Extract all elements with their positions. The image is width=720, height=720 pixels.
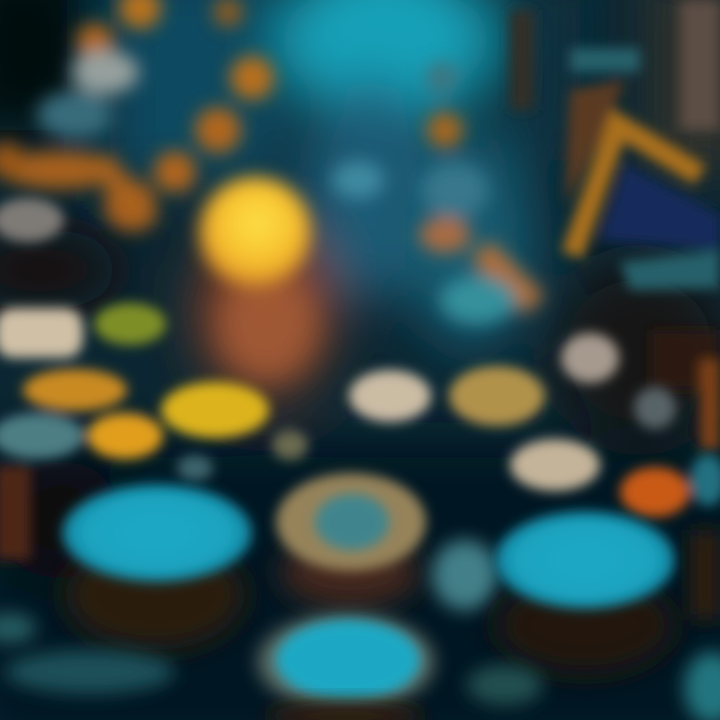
central figure [419, 62, 535, 324]
small teal bowl [432, 540, 498, 610]
small pale highlight [332, 161, 384, 199]
cream and ochre dishes, centre right [177, 333, 720, 517]
foreground shapes, bottom edge [0, 530, 720, 720]
turquoise bowl, left [62, 484, 252, 650]
turquoise bowl, bottom centre [258, 614, 434, 720]
orange bead chain, top left [0, 0, 274, 231]
ringed bowl, centre [276, 473, 426, 608]
striped roof, top right [510, 0, 720, 450]
cream and yellow dishes, left [0, 198, 269, 560]
turquoise bowl, right [495, 511, 675, 675]
glowing sun orb [199, 177, 318, 380]
